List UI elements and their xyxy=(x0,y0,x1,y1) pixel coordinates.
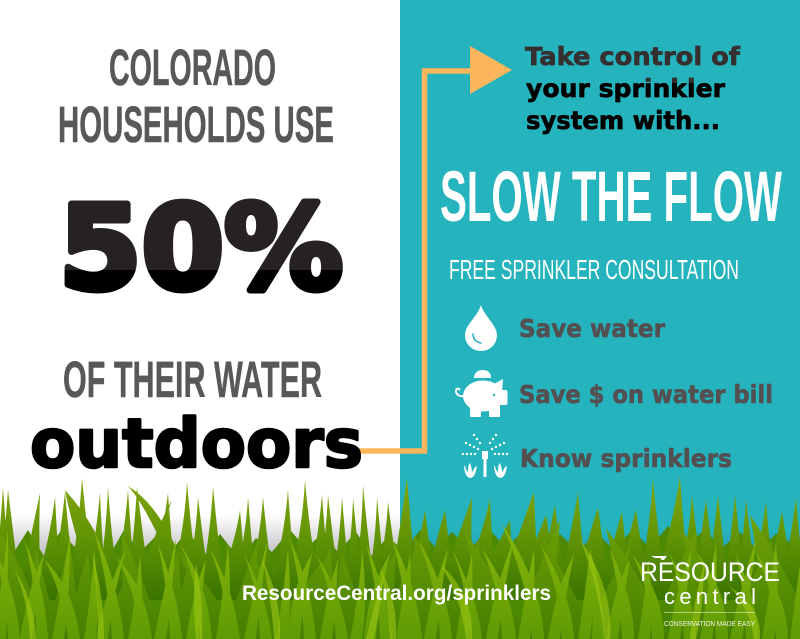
icon: piggy bank xyxy=(456,370,508,417)
icon: sprinkler xyxy=(462,434,508,478)
logo: Resource Central: RESOURCE xyxy=(640,557,780,587)
grass shadow right xyxy=(400,530,800,590)
text block: take control: system with... xyxy=(526,106,720,135)
heading: Colorado households use: HOUSEHOLDS USE xyxy=(58,96,334,153)
panel: teal background right xyxy=(400,0,800,639)
benefit: save money xyxy=(456,370,773,417)
heading: Colorado households use xyxy=(58,39,334,153)
benefit: save money: Save $ on water bill xyxy=(519,380,773,409)
website url: ResourceCentral.org/sprinklers xyxy=(242,582,551,605)
benefit: save water xyxy=(465,305,666,351)
logo: Resource Central xyxy=(640,556,780,628)
text block: take control xyxy=(525,42,741,135)
grass lawn xyxy=(0,476,800,639)
benefit: know sprinklers: Know sprinklers xyxy=(520,444,732,473)
big number: 50%: 50% xyxy=(59,182,343,316)
text block: take control: Take control of xyxy=(525,42,741,71)
grass shadow left xyxy=(0,515,400,585)
benefit: know sprinklers xyxy=(462,434,732,478)
benefit: save water: Save water xyxy=(519,314,666,343)
icon: water drop xyxy=(465,305,497,351)
logo: Resource Central: CONSERVATION MADE EASY xyxy=(664,621,755,628)
heading: of their water: OF THEIR WATER xyxy=(63,351,322,408)
heading: Colorado households use: COLORADO xyxy=(109,39,276,96)
emphasis word: outdoors: outdoors xyxy=(30,405,363,484)
logo: Resource Central: central xyxy=(664,584,756,609)
panel: white background left xyxy=(0,0,400,639)
arrow: outdoors to sprinkler text xyxy=(358,46,512,451)
text block: take control: your sprinkler xyxy=(526,74,726,103)
